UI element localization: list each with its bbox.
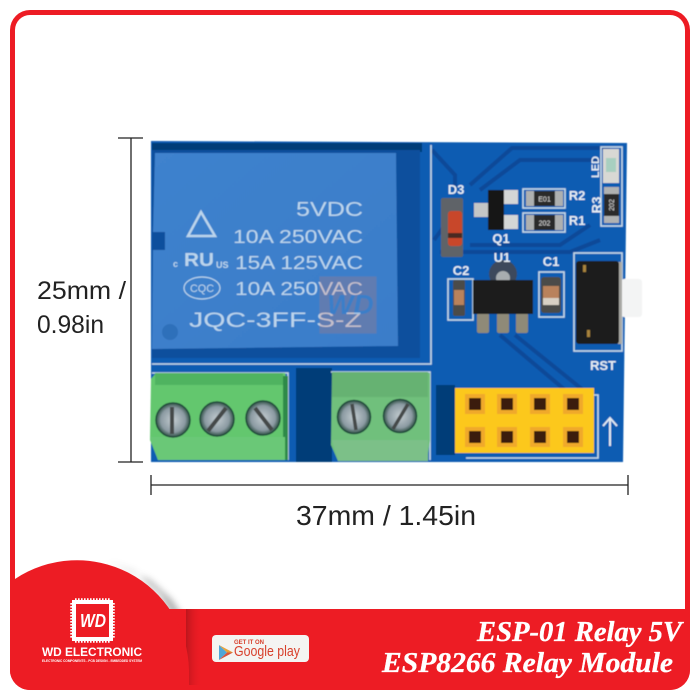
red curved shape (10, 560, 189, 690)
led (603, 149, 619, 183)
certification labels: CQC (190, 283, 214, 295)
curve shadow (122, 567, 182, 609)
relay certification marks (184, 212, 220, 299)
component labels: RST (590, 358, 616, 373)
component labels: U1 (494, 250, 510, 265)
component labels: R2 (569, 188, 585, 203)
google play text: Google play (234, 643, 300, 660)
resistor R2 (526, 191, 563, 206)
board arrow (603, 418, 617, 446)
component labels: D3 (448, 182, 464, 197)
relay top face (152, 153, 398, 349)
watermark (320, 277, 376, 333)
badge background (212, 635, 309, 662)
relay ratings text: 10A 250VAC (235, 278, 363, 299)
relay ratings text: 5VDC (296, 199, 363, 221)
height dimension line (118, 138, 143, 462)
product title: ESP8266 Relay Module (381, 648, 673, 679)
product title: ESP-01 Relay 5V (476, 617, 684, 648)
width dimension line (151, 475, 628, 495)
dark board shading (152, 143, 455, 462)
get it on: GET IT ON (234, 640, 264, 646)
pcb traces (432, 148, 610, 390)
component labels (448, 156, 616, 373)
relay ratings text: JQC-3FF-S-Z (189, 309, 362, 332)
certification labels: c (173, 259, 178, 269)
relay mounting hole (162, 324, 178, 340)
relay side (152, 150, 420, 358)
brand tagline: ELECTRONIC COMPONENTS - PCB DESIGN - EMBEDDED SYSTEM (42, 659, 142, 663)
google play badge (212, 635, 309, 662)
transistor Q1 (474, 190, 518, 230)
component labels: LED (590, 156, 602, 178)
banner shadow (186, 609, 202, 685)
terminal block 2 pin (331, 372, 430, 461)
width label: 37mm / 1.45in (296, 500, 476, 531)
relay module board (150, 141, 642, 462)
certification labels: US (216, 260, 229, 270)
resistor R1 (526, 215, 563, 230)
component labels: C1 (543, 254, 559, 269)
brand name: WD ELECTRONIC (42, 645, 142, 659)
yellow pin header (455, 388, 594, 453)
diode D3 (441, 198, 463, 257)
relay ratings text: 15A 125VAC (235, 252, 363, 273)
reset switch (576, 261, 642, 344)
bottom banner (10, 609, 690, 690)
logo chip icon (72, 600, 114, 642)
resistor R3 (604, 187, 619, 223)
pcb (151, 141, 627, 462)
component labels: R1 (569, 213, 585, 228)
logo WD mark: WD (80, 611, 106, 631)
relay (152, 150, 420, 358)
resistor R1: 202 (539, 220, 550, 228)
relay ratings text: 10A 250VAC (233, 226, 363, 247)
play icon (219, 645, 233, 660)
component labels: C2 (453, 263, 469, 278)
product title (381, 617, 684, 679)
component labels: Q1 (492, 231, 510, 246)
height label: 0.98in (37, 311, 104, 339)
logo panel (10, 560, 202, 690)
certification labels (173, 250, 229, 295)
height label: 25mm / (37, 277, 126, 305)
resistor R2: E01 (538, 196, 551, 204)
component labels: R3 (589, 197, 604, 213)
height label (37, 277, 126, 339)
regulator U1 (473, 260, 533, 333)
watermark: WD (327, 289, 374, 320)
capacitor C2 (453, 280, 465, 316)
capacitor C1 (541, 277, 561, 313)
silkscreen outlines (152, 145, 622, 460)
terminal block 3 pin (150, 373, 288, 460)
resistor R3: 202 (609, 199, 616, 211)
certification labels: RU (184, 250, 214, 270)
relay ratings text (189, 199, 363, 332)
